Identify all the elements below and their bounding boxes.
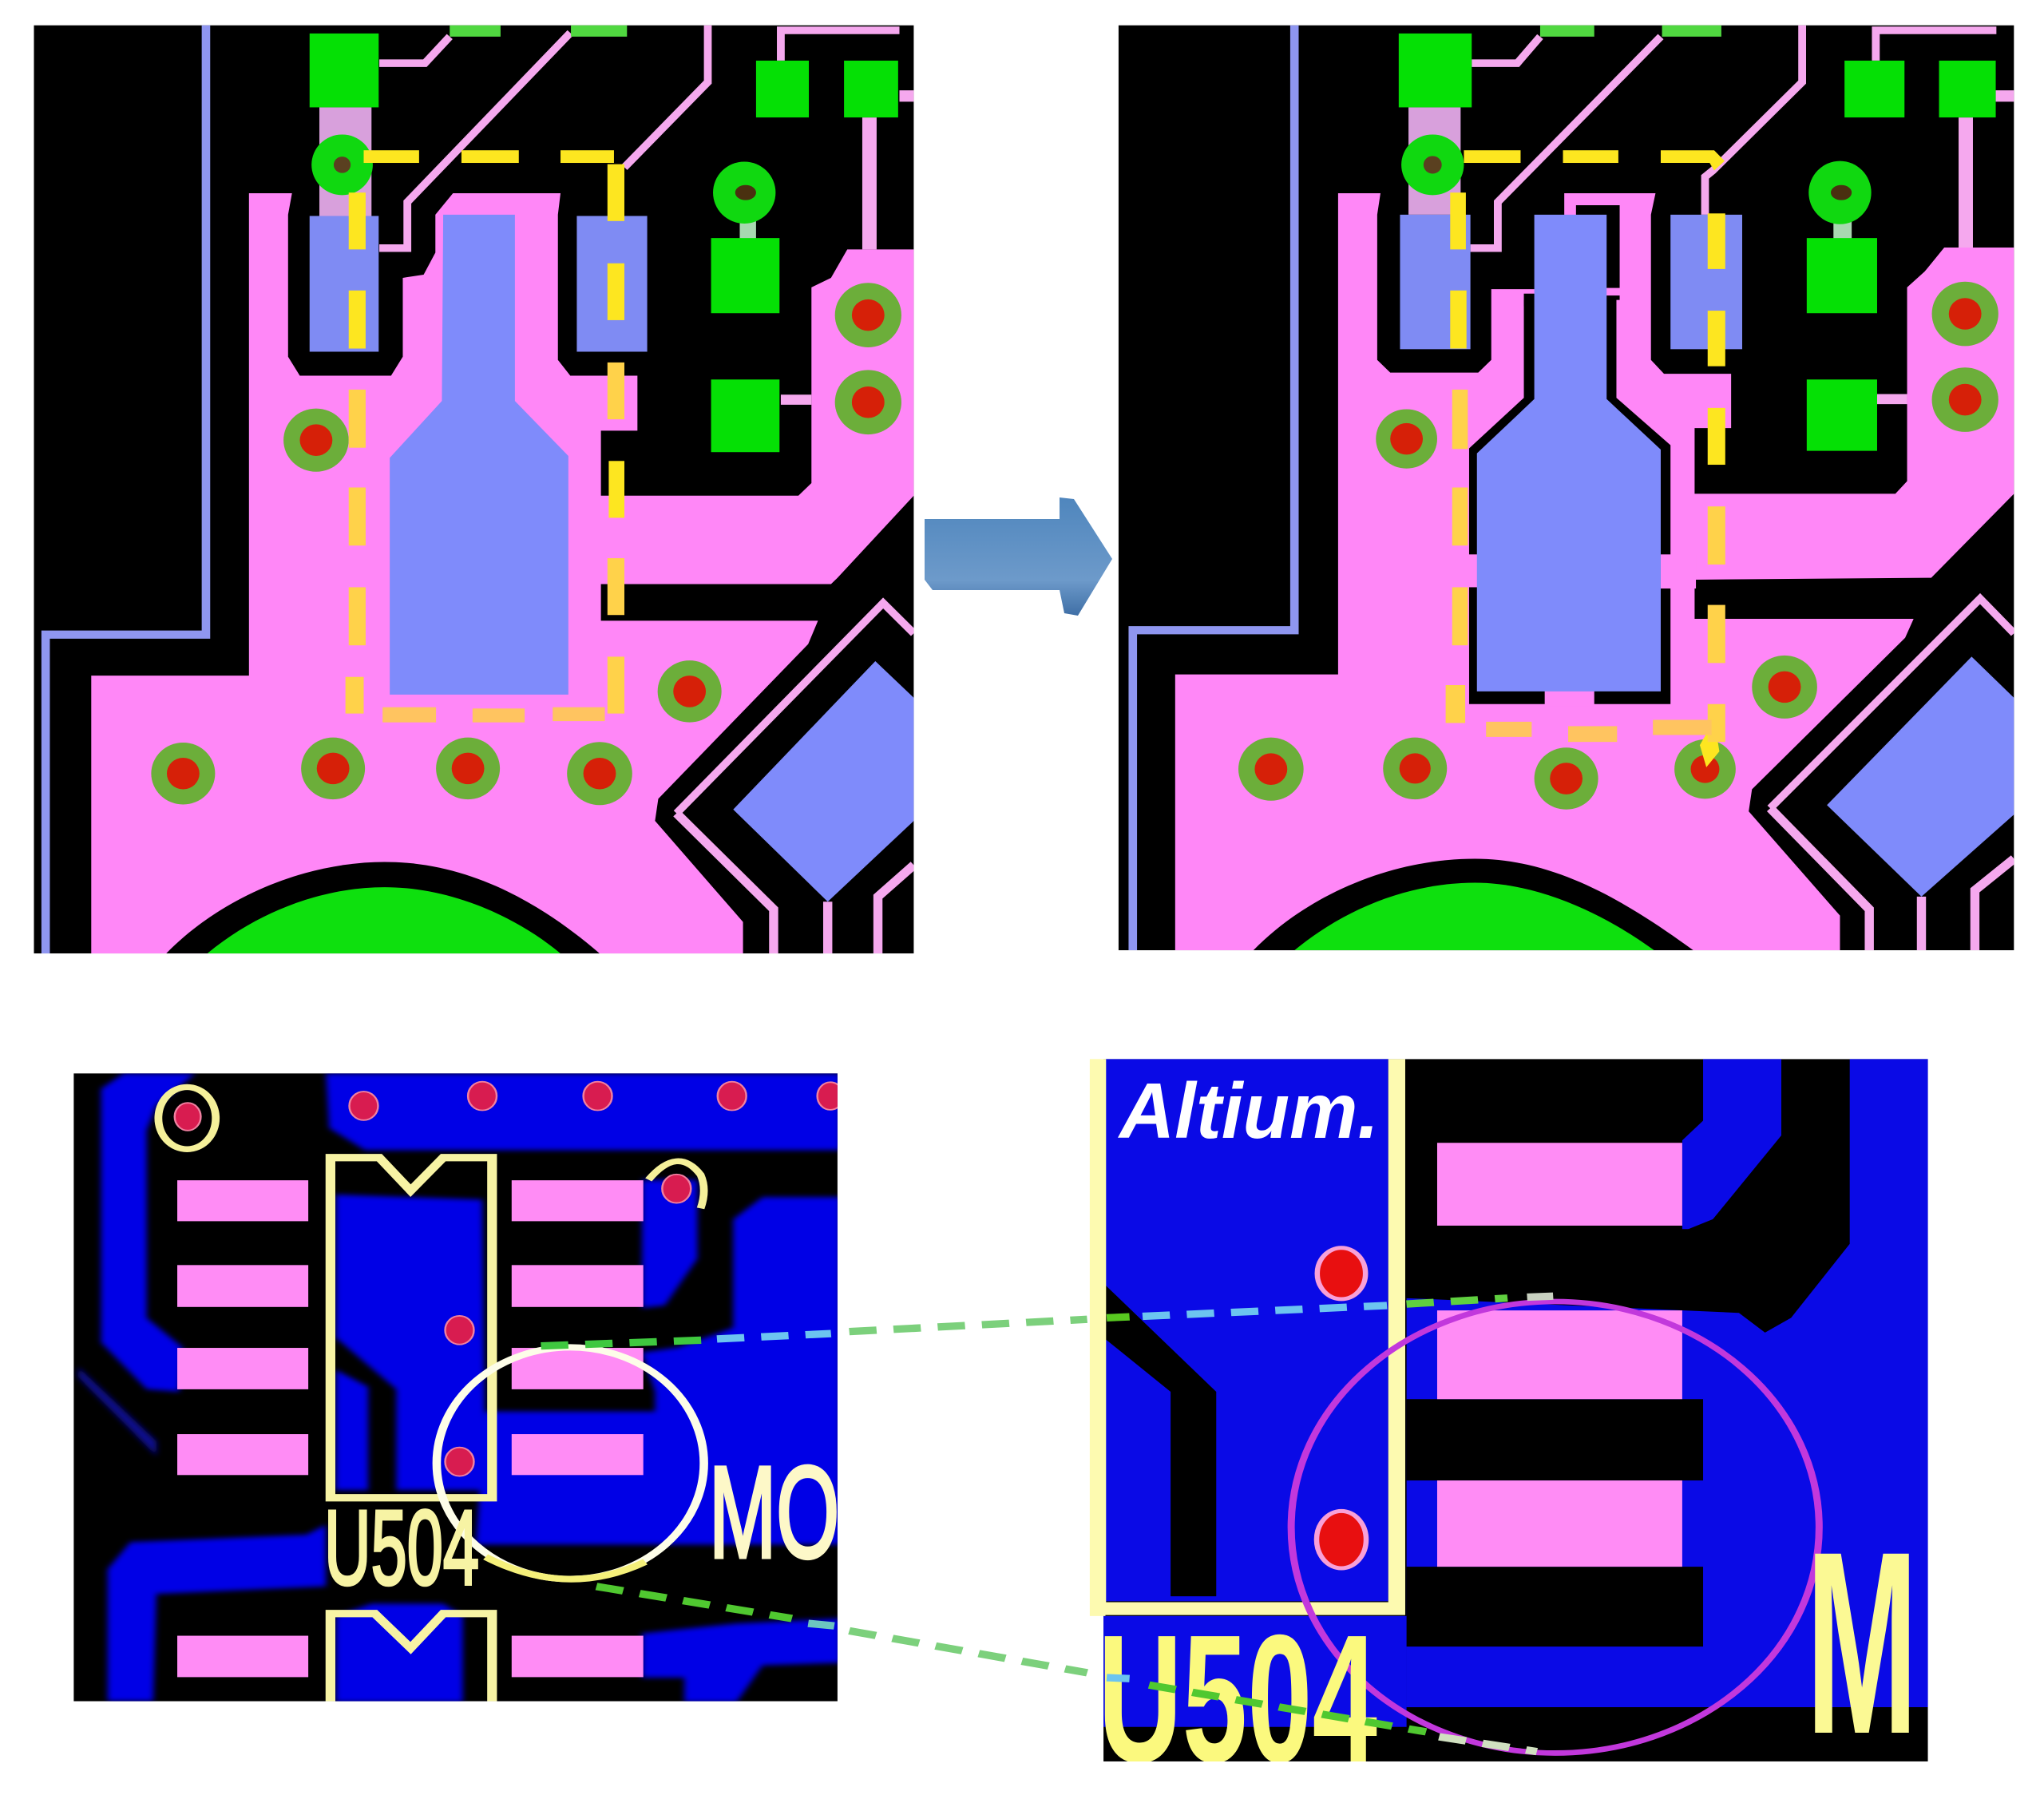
panel: revised PCB layout, top right [1119, 26, 2014, 950]
component outline [331, 1158, 492, 1702]
arrow between layouts [925, 497, 1112, 616]
white highlight circle [437, 1347, 704, 1579]
Altium logo: Altium. [1117, 1067, 1379, 1155]
vias [1317, 1248, 1366, 1568]
clearance around bottle pad [1469, 205, 1670, 704]
component outline [1098, 1059, 1396, 1609]
small pads [310, 26, 898, 452]
silkscreen label MOT left: MOT [709, 1439, 889, 1585]
component label U504 right: U504 [1098, 1598, 1377, 1795]
copper pour [1175, 193, 2014, 950]
pale outline overflow [1090, 1059, 1105, 1616]
panel: IC footprint U504, bottom left [73, 1073, 843, 1702]
dashed keep-out outline [1446, 150, 1725, 767]
black arc clearance [1254, 858, 1693, 950]
vias [151, 283, 901, 805]
dashed zoom connector lines [541, 1296, 1553, 1752]
copper fill [78, 1073, 841, 1702]
copper pour [91, 193, 913, 953]
green arc pad [1294, 883, 1654, 950]
magenta highlight circle [1291, 1302, 1819, 1753]
green arc pad [208, 887, 561, 953]
small pads [1399, 26, 1996, 451]
large bottle-shaped pad [1477, 215, 1661, 691]
silkscreen label M right: M [1806, 1498, 1918, 1789]
component pads [177, 1180, 644, 1677]
component pads [1437, 1143, 1682, 1567]
traces [1471, 26, 2014, 950]
clearance gaps [1103, 1229, 1739, 1646]
vias [175, 1082, 843, 1476]
black arc clearance [166, 862, 600, 953]
thermal spokes [1468, 288, 1696, 706]
dashed keep-out outline [346, 150, 624, 723]
large bottle-shaped pad [390, 215, 568, 695]
vias [1238, 282, 1998, 810]
silkscreen rings around vias [158, 1087, 704, 1208]
component label U504 left: U504 [324, 1489, 479, 1607]
diamond pad [1827, 656, 2014, 897]
panel: original PCB layout, top left [34, 26, 913, 953]
traces [379, 26, 913, 953]
panel: zoomed view of footprint, bottom right [1098, 1059, 1928, 1761]
copper fill [1103, 1059, 1928, 1727]
diamond pad [733, 661, 913, 901]
